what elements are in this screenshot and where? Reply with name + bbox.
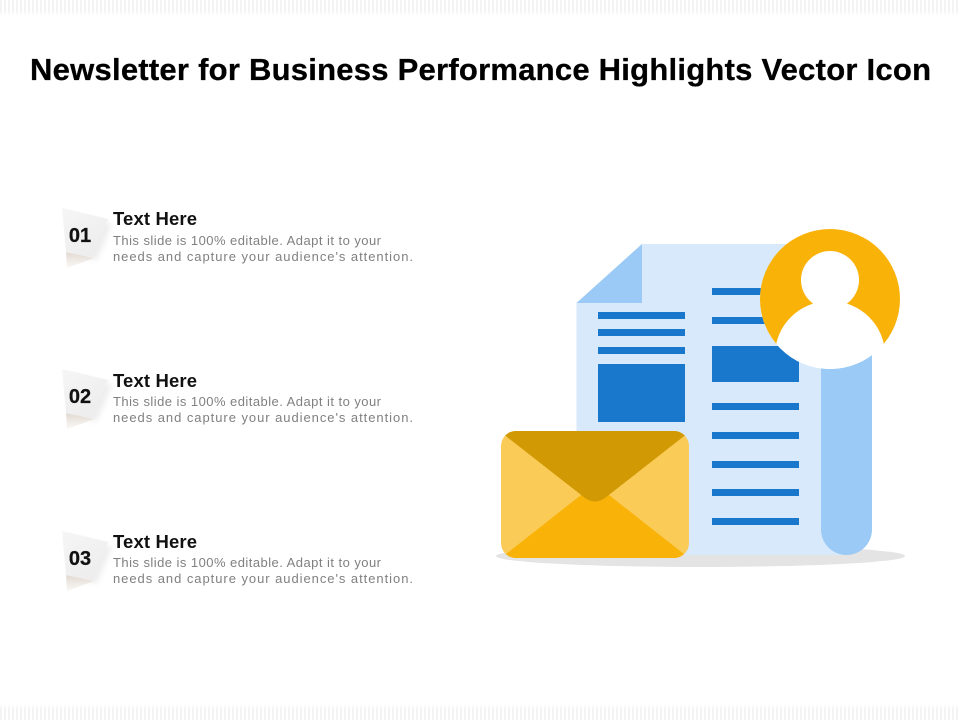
icon: newsletter page [576,244,872,555]
badge 03: 03 [69,548,91,570]
body text 02: This slide is 100% editable. Adapt it to your [113,394,382,409]
heading 03: Text Here [113,531,197,552]
newsletter illustration [496,229,905,567]
title: Newsletter for Business Performance Highlights Vector Icon [30,52,931,87]
icon: user avatar [760,229,900,369]
heading 01: Text Here [113,208,197,229]
badge 02 [62,369,112,429]
heading 02: Text Here [113,370,197,391]
body text 01: needs and capture your audience's attention. [113,249,413,264]
badge 01 [62,208,112,268]
body text 01: This slide is 100% editable. Adapt it to your [113,233,382,248]
list item 02 [62,369,413,429]
badge 03 [62,531,112,591]
badge 01: 01 [69,225,91,247]
icon: envelope [500,431,690,558]
list item 03 [62,531,413,591]
body text 02: needs and capture your audience's attention. [113,410,413,425]
ground shadow [496,545,905,567]
body text 03: needs and capture your audience's attention. [113,571,413,586]
badge 02: 02 [69,386,91,408]
list item 01 [62,208,413,268]
body text 03: This slide is 100% editable. Adapt it to your [113,555,382,570]
